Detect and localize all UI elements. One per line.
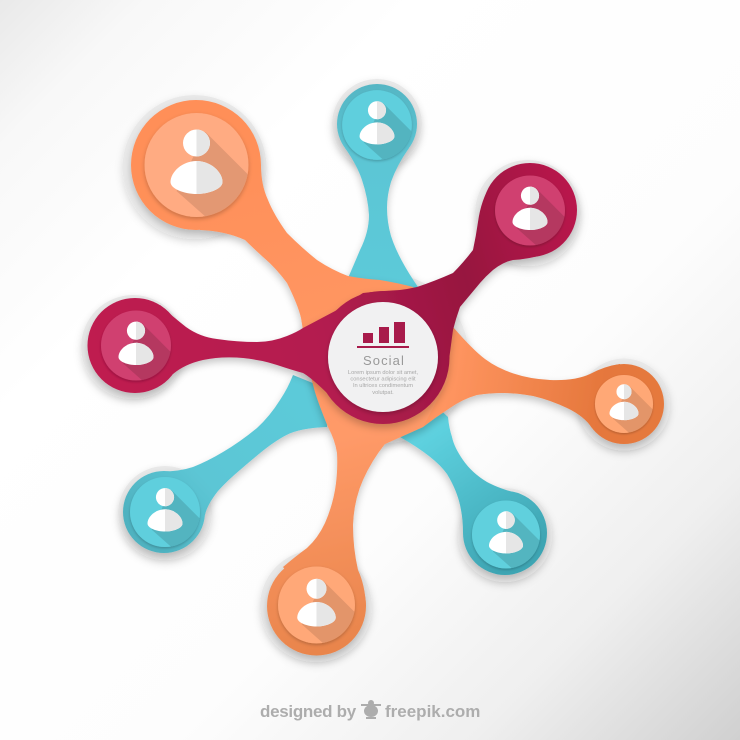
hub white disc: [328, 302, 438, 412]
heading: Social: [363, 353, 405, 368]
node disc: [123, 471, 205, 553]
person icon: left crimson: [100, 310, 172, 383]
branch: lower left teal: [123, 375, 330, 571]
branches: orange: [131, 100, 674, 670]
node disc: [463, 491, 547, 575]
node disc: [337, 84, 417, 164]
arm: [400, 400, 520, 533]
footer credit: [260, 700, 480, 721]
node disc: left crimson: [88, 298, 182, 393]
arm: right orange: [385, 327, 624, 444]
body text: In ultrices condimentum: [353, 383, 413, 389]
arm: top left to bottom orange: [195, 165, 450, 606]
node disc: right orange: [584, 364, 664, 444]
center hub content: [328, 302, 438, 412]
person icon: [129, 477, 201, 550]
person icon: right crimson: [494, 176, 566, 248]
footer credit: designed by: [260, 702, 357, 721]
person icon: [341, 90, 413, 162]
footer credit: freepik.com: [385, 702, 480, 721]
body text: [348, 370, 419, 396]
node disc: right crimson: [483, 163, 577, 257]
halo discs: [81, 79, 670, 662]
arm: [135, 184, 545, 398]
branch: lower right teal: [400, 412, 550, 582]
arm: [345, 148, 420, 295]
node disc: big orange: [131, 100, 261, 230]
hub crimson ring: [316, 291, 450, 424]
bar chart icon: [357, 322, 409, 348]
branch: top teal: [334, 84, 420, 288]
body text: Lorem ipsum dolor sit amet,: [348, 370, 419, 376]
icon: freepik mascot: [361, 700, 381, 719]
body text: consectetur adipiscing elit: [350, 376, 416, 382]
node disc: bottom orange: [267, 556, 366, 656]
person icon: right orange: [594, 375, 654, 435]
person icon: big orange: [142, 113, 250, 221]
arm: [158, 375, 330, 515]
body text: volutpat.: [372, 390, 394, 396]
person icon: bottom orange: [276, 566, 356, 646]
branch: crimson with hub: [88, 163, 591, 424]
person icon: [471, 500, 541, 571]
